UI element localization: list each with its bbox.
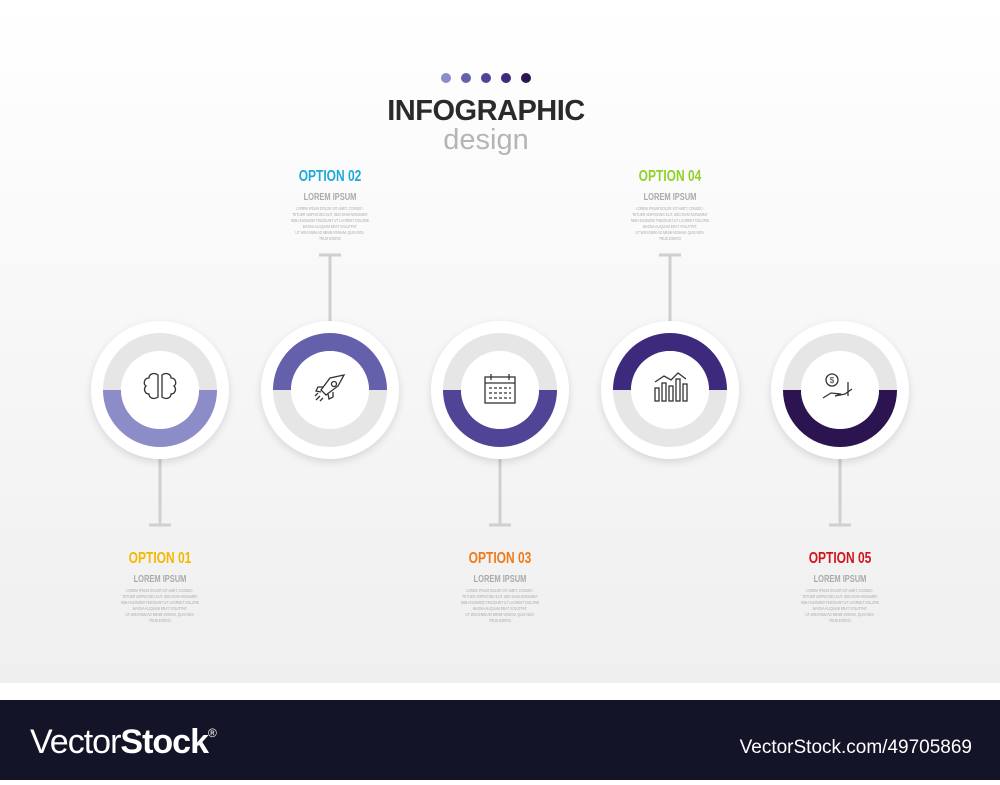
text: option 02: TRUD EXERCI	[319, 235, 341, 241]
text: option 03: TRUD EXERCI	[489, 617, 511, 623]
text: option 02: MAGNA ALIQUAM ERAT VOLUTPAT.	[303, 223, 357, 229]
circle 4	[601, 321, 739, 459]
text: option 04: TRUD EXERCI	[659, 235, 681, 241]
text: option 05: LOREM IPSUM	[814, 573, 866, 584]
text: option 01: OPTION 01	[129, 548, 191, 566]
text: option 05: TETUER ADIPISCING ELIT, SED DIAM NONUMMY	[802, 593, 878, 599]
footer band	[0, 700, 1000, 780]
text: option 04: OPTION 04	[639, 166, 701, 184]
circle 3	[431, 321, 569, 459]
text: option 04: LOREM IPSUM	[644, 191, 696, 202]
icon: rocket	[315, 375, 344, 401]
icon: bar chart	[655, 373, 687, 401]
header dots	[441, 73, 531, 83]
text: option 03: LOREM IPSUM	[474, 573, 526, 584]
text: option 01: UT WISI ENIM AD MINIM VENIAM, QUIS NOS-	[125, 611, 195, 617]
icon: brain	[144, 374, 176, 398]
text: option 03: LOREM IPSUM DOLOR SIT AMET, CONSEC-	[466, 587, 534, 593]
text: option 03: UT WISI ENIM AD MINIM VENIAM, QUIS NOS-	[465, 611, 535, 617]
text: option 04: TETUER ADIPISCING ELIT, SED DIAM NONUMMY	[632, 211, 708, 217]
subtitle: design	[443, 124, 529, 156]
text: option 01: NIBH EUISMOD TINCIDUNT UT LAOREET DOLORE	[121, 599, 199, 605]
text: option 03: NIBH EUISMOD TINCIDUNT UT LAOREET DOLORE	[461, 599, 539, 605]
text: option 03	[461, 548, 539, 623]
circle 2	[261, 321, 399, 459]
text: option 05: LOREM IPSUM DOLOR SIT AMET, CONSEC-	[806, 587, 874, 593]
text: option 04: NIBH EUISMOD TINCIDUNT UT LAOREET DOLORE	[631, 217, 709, 223]
footer logo: VectorStock	[30, 723, 208, 761]
text: option 05: NIBH EUISMOD TINCIDUNT UT LAOREET DOLORE	[801, 599, 879, 605]
text: option 05: OPTION 05	[809, 548, 871, 566]
text: option 03: OPTION 03	[469, 548, 531, 566]
text: option 01: LOREM IPSUM DOLOR SIT AMET, CONSEC-	[126, 587, 194, 593]
text: option 05	[801, 548, 879, 623]
text: option 02: UT WISI ENIM AD MINIM VENIAM, QUIS NOS-	[295, 229, 365, 235]
text: option 03: TETUER ADIPISCING ELIT, SED DIAM NONUMMY	[462, 593, 538, 599]
text: option 05: UT WISI ENIM AD MINIM VENIAM, QUIS NOS-	[805, 611, 875, 617]
text: option 04: MAGNA ALIQUAM ERAT VOLUTPAT.	[643, 223, 697, 229]
text: option 02: LOREM IPSUM DOLOR SIT AMET, CONSEC-	[296, 205, 364, 211]
text: option 05: TRUD EXERCI	[829, 617, 851, 623]
text: option 04: UT WISI ENIM AD MINIM VENIAM, QUIS NOS-	[635, 229, 705, 235]
text: option 01: TETUER ADIPISCING ELIT, SED DIAM NONUMMY	[122, 593, 198, 599]
icon: money hand: $	[830, 376, 835, 385]
text: option 01: LOREM IPSUM	[134, 573, 186, 584]
text: option 04: LOREM IPSUM DOLOR SIT AMET, CONSEC-	[636, 205, 704, 211]
circle 5	[771, 321, 909, 459]
text: option 02: LOREM IPSUM	[304, 191, 356, 202]
stems	[149, 255, 851, 525]
text: option 02: NIBH EUISMOD TINCIDUNT UT LAOREET DOLORE	[291, 217, 369, 223]
text: option 02: TETUER ADIPISCING ELIT, SED DIAM NONUMMY	[292, 211, 368, 217]
icon: calendar	[485, 374, 515, 403]
text: option 01: MAGNA ALIQUAM ERAT VOLUTPAT.	[133, 605, 187, 611]
text: option 03: MAGNA ALIQUAM ERAT VOLUTPAT.	[473, 605, 527, 611]
text: option 01: TRUD EXERCI	[149, 617, 171, 623]
text: option 01	[121, 548, 199, 623]
title: INFOGRAPHIC	[387, 95, 585, 127]
text: option 04	[631, 166, 709, 241]
text: option 02: OPTION 02	[299, 166, 361, 184]
text: option 02	[291, 166, 369, 241]
circle 1	[91, 321, 229, 459]
footer url: VectorStock.com/49705869	[740, 737, 972, 758]
footer logo: ®	[208, 726, 217, 740]
text: option 05: MAGNA ALIQUAM ERAT VOLUTPAT.	[813, 605, 867, 611]
